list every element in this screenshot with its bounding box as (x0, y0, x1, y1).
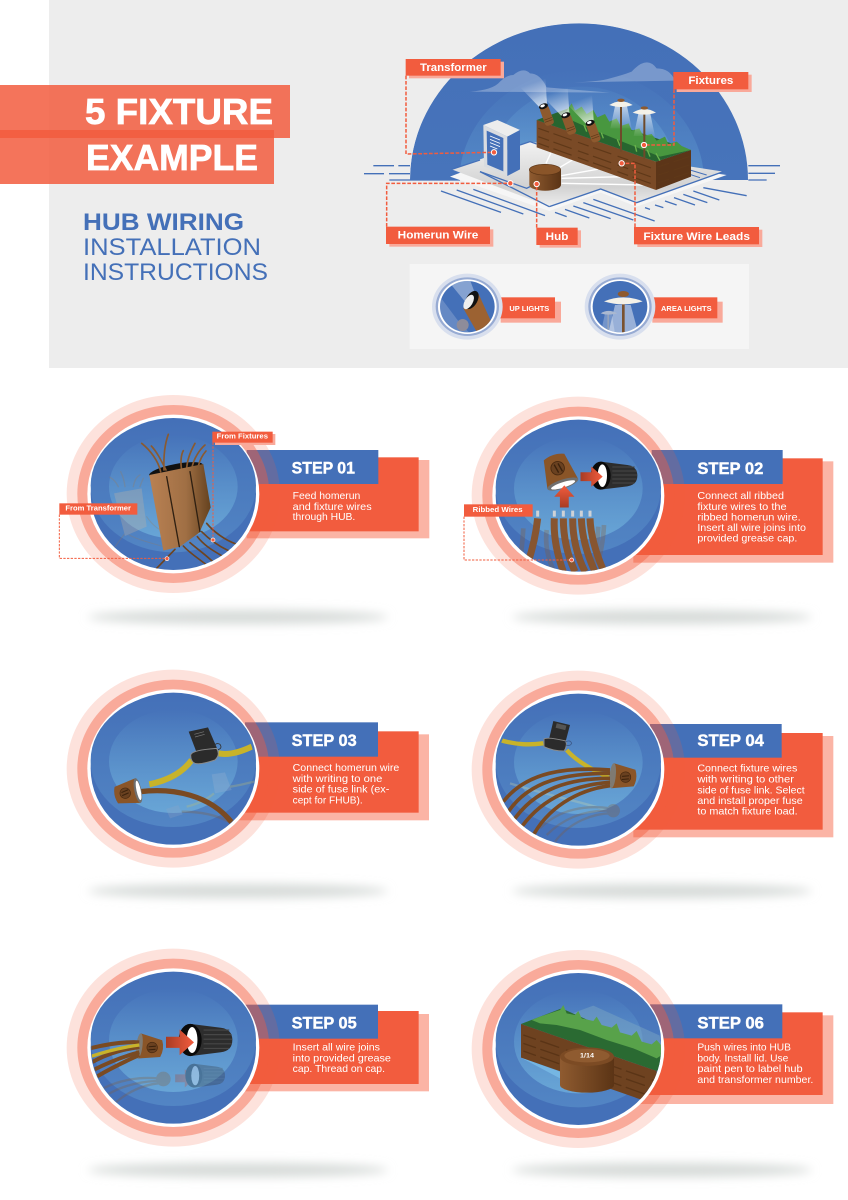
hub (529, 164, 561, 191)
legend: area lights (585, 274, 723, 340)
callout: hub (534, 181, 581, 248)
step text: into provided grease (293, 1054, 391, 1065)
step text: body. Install lid. Use (697, 1053, 788, 1064)
legend: area lights: AREA LIGHTS (661, 304, 712, 313)
illustration: hub with wires (110, 434, 236, 568)
area lights (609, 99, 656, 159)
callout: hub: Hub (546, 231, 568, 243)
tag: from transformer (59, 503, 169, 561)
tag: from fixtures: From Fixtures (217, 432, 268, 441)
title: 5 FIXTURE (85, 91, 273, 132)
sky dome (410, 23, 748, 180)
callout: transformer: Transformer (420, 62, 487, 74)
step text: Connect homerun wire (293, 763, 399, 774)
platform (450, 142, 727, 211)
step text: Insert all wire joins (293, 1043, 380, 1054)
step text: to match fixture load. (697, 807, 798, 818)
step text: side of fuse link. Select (697, 785, 805, 796)
step text: cap. Thread on cap. (293, 1064, 385, 1075)
title (0, 85, 290, 184)
tag: from fixtures (211, 432, 275, 542)
step text: with writing to other (696, 775, 795, 786)
callout: transformer (406, 59, 504, 155)
step text (292, 763, 399, 806)
ground lines (364, 166, 780, 221)
legend: up lights (432, 274, 561, 340)
step 02 (464, 397, 833, 595)
step text: cept for FHUB). (293, 795, 363, 806)
step 02: STEP 02 (697, 459, 763, 478)
step text: Feed homerun (293, 491, 360, 502)
panel: legend (410, 264, 749, 349)
callout: fixture wire leads (619, 161, 762, 247)
step text: provided grease cap. (697, 534, 797, 545)
step text (696, 764, 805, 818)
step text: fixture wires to the (697, 502, 787, 513)
tag: from transformer: From Transformer (65, 504, 131, 513)
step text: and fixture wires (293, 502, 372, 513)
illustration: ribbed wires, nut and cap (520, 450, 637, 572)
tag: ribbed wires (464, 504, 574, 562)
callout: homerun wire (386, 181, 513, 247)
transformer cabinet (483, 120, 520, 176)
step 01: STEP 01 (292, 458, 355, 477)
step text (697, 1043, 813, 1086)
legend: up lights: UP LIGHTS (509, 304, 549, 313)
step text: and install proper fuse (697, 796, 803, 807)
step text (293, 491, 372, 523)
step 05 (67, 949, 429, 1147)
step 03 (67, 670, 429, 868)
shadows under steps (88, 610, 812, 1177)
step 04 (472, 671, 833, 869)
step text: Connect all ribbed (697, 491, 784, 502)
callout: homerun wire: Homerun Wire (398, 230, 478, 242)
callout: fixtures: Fixtures (688, 75, 733, 87)
subtitle: INSTALLATION (83, 234, 261, 261)
step text: side of fuse link (ex- (293, 784, 389, 795)
hero diagram (364, 23, 780, 349)
subtitle: INSTRUCTIONS (83, 259, 268, 286)
illustration: soil, grass and installed hub (521, 1005, 661, 1100)
step text (293, 1043, 391, 1075)
step 06 (472, 950, 833, 1148)
subtitle: HUB WIRING (83, 209, 244, 236)
step 05: STEP 05 (292, 1014, 357, 1033)
illustration: fixture wires and fuse (500, 721, 638, 842)
step text: Insert all wire joins into (697, 523, 806, 534)
step text: Connect fixture wires (697, 764, 798, 775)
step text: and transformer number. (697, 1075, 813, 1086)
step 04: STEP 04 (697, 731, 765, 750)
step 01 (59, 395, 429, 593)
step 06: STEP 06 (697, 1014, 764, 1033)
subtitle (83, 209, 268, 286)
step text: paint pen to label hub (697, 1064, 803, 1075)
illustration: soil, grass and installed hub: 1/14 (580, 1054, 595, 1060)
step text (697, 491, 806, 545)
title: EXAMPLE (86, 137, 258, 178)
illustration: wire nut and grease cap (90, 1024, 232, 1105)
tag: ribbed wires: Ribbed Wires (473, 505, 523, 514)
panel: header background (49, 0, 848, 368)
step text: Push wires into HUB (697, 1043, 791, 1054)
up lights (520, 78, 608, 147)
step text: ribbed homerun wire. (697, 513, 801, 524)
step text: with writing to one (292, 774, 382, 785)
callout: fixtures (641, 72, 752, 148)
soil planter (537, 103, 691, 190)
illustration: fuse link and wires (112, 727, 257, 822)
step text: through HUB. (293, 512, 355, 523)
step 03: STEP 03 (292, 731, 357, 750)
fixture wire leads (546, 125, 645, 185)
callout: fixture wire leads: Fixture Wire Leads (643, 231, 750, 243)
